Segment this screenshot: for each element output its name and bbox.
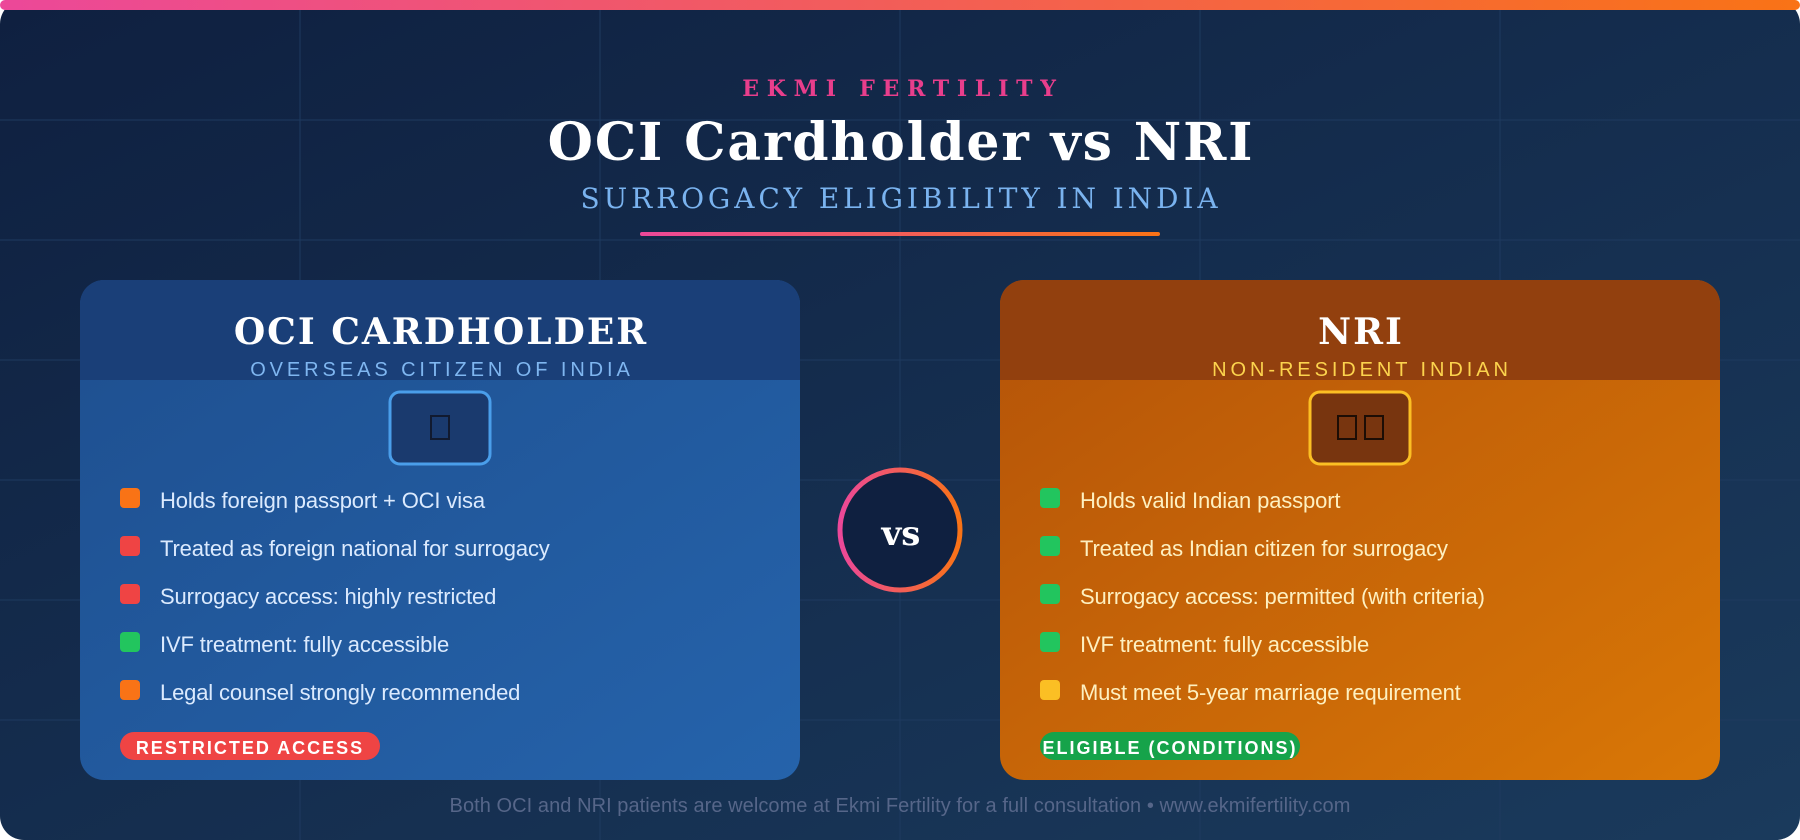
status badge: restricted: RESTRICTED ACCESS	[136, 738, 364, 758]
title underline	[640, 232, 1160, 236]
point 5: Must meet 5-year marriage requirement	[1080, 680, 1461, 705]
panel subheading: OVERSEAS CITIZEN OF INDIA	[250, 359, 634, 381]
list: OCI points	[120, 488, 550, 705]
panel subheading: NON-RESIDENT INDIAN	[1212, 359, 1512, 381]
VS badge: vs	[881, 514, 920, 554]
footer note: Both OCI and NRI patients are welcome at Ekmi Fertility for a full consultation • www.ekmifertility.com	[450, 795, 1350, 817]
point 3: Surrogacy access: highly restricted	[160, 584, 496, 609]
panel body	[1000, 280, 1720, 780]
panel header band	[80, 280, 800, 380]
panel: NRI	[1000, 280, 1720, 780]
brand name: EKMI FERTILITY	[742, 76, 1064, 102]
panel body	[80, 280, 800, 780]
status badge: restricted	[120, 732, 380, 760]
icon: flag placeholder	[1310, 392, 1410, 464]
panel header band	[1000, 280, 1720, 380]
icon: passport placeholder	[390, 392, 490, 464]
header block	[548, 76, 1254, 236]
point 4: IVF treatment: fully accessible	[1080, 632, 1369, 657]
list: NRI points	[1040, 488, 1485, 705]
point 4: IVF treatment: fully accessible	[160, 632, 449, 657]
point 2: Treated as Indian citizen for surrogacy	[1080, 536, 1448, 561]
status badge: eligible: ELIGIBLE (CONDITIONS)	[1042, 738, 1298, 758]
panel heading: NRI	[1318, 311, 1404, 353]
point 2: Treated as foreign national for surrogacy	[160, 536, 550, 561]
panel heading: OCI CARDHOLDER	[234, 311, 648, 353]
top accent bar	[0, 0, 1800, 10]
subtitle: SURROGACY ELIGIBILITY IN INDIA	[581, 182, 1221, 215]
VS badge	[840, 470, 960, 590]
panel: OCI cardholder	[80, 280, 800, 780]
point 3: Surrogacy access: permitted (with criteria)	[1080, 584, 1485, 609]
point 1: Holds valid Indian passport	[1080, 488, 1340, 513]
point 1: Holds foreign passport + OCI visa	[160, 488, 486, 513]
point 5: Legal counsel strongly recommended	[160, 680, 520, 705]
title: OCI Cardholder vs NRI	[548, 112, 1254, 173]
